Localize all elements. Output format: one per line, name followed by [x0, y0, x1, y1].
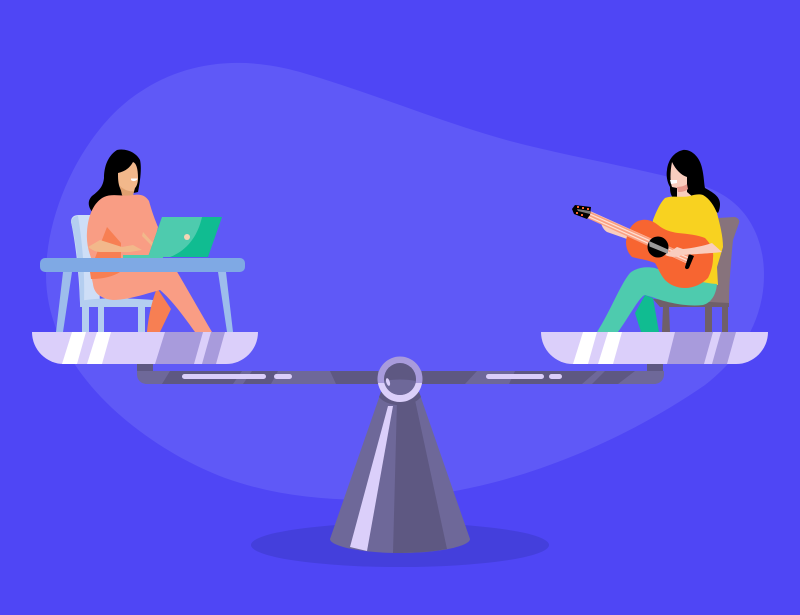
front leg	[597, 267, 717, 332]
pan body	[32, 332, 258, 364]
strings over hole	[649, 241, 668, 254]
front arm	[665, 243, 722, 257]
headstock plate	[577, 209, 590, 214]
hair	[89, 149, 141, 213]
chair legs	[82, 304, 145, 332]
laptop logo	[184, 234, 190, 240]
guitar headstock	[572, 205, 591, 219]
chair seat	[80, 298, 153, 307]
chair back	[71, 215, 100, 303]
right long highlight	[486, 374, 544, 379]
neck shade	[120, 186, 134, 197]
scale beam	[137, 364, 664, 384]
scale stand	[330, 392, 470, 553]
ring centre light	[384, 380, 416, 395]
left support	[137, 364, 153, 371]
smile	[670, 180, 677, 184]
neck and face	[118, 162, 138, 197]
pan dark stripes	[667, 332, 736, 364]
right short highlight	[549, 374, 562, 379]
ring centre	[384, 363, 416, 395]
hair	[667, 150, 720, 213]
back leg	[635, 295, 659, 332]
left scale pan	[32, 332, 258, 364]
pan body	[541, 332, 768, 364]
right figure: woman with guitar	[572, 150, 739, 332]
pivot ring	[378, 356, 422, 402]
chair back shade	[71, 216, 84, 303]
table top	[40, 258, 245, 272]
left figure: woman at laptop	[40, 149, 245, 332]
right scale pan	[541, 332, 768, 364]
chair back	[690, 217, 739, 303]
pan white stripes	[573, 332, 622, 364]
chair legs	[662, 307, 728, 332]
forearm	[88, 240, 142, 252]
pan white stripes	[62, 332, 111, 364]
torso and sleeve	[87, 195, 158, 268]
guitar sound hole	[648, 236, 668, 258]
sleeve inner line	[142, 232, 153, 246]
shirt	[650, 194, 723, 285]
ring glint	[385, 378, 391, 386]
lower torso shade	[90, 272, 120, 279]
guitar bridge	[685, 254, 694, 269]
pan dark stripes	[155, 332, 225, 364]
neck shade	[677, 184, 688, 192]
ground shadow	[251, 523, 549, 567]
laptop screen light	[148, 217, 202, 257]
beam dark segments	[162, 371, 635, 384]
ring top	[378, 356, 422, 402]
orange torso shade	[95, 227, 121, 258]
cone highlight	[350, 406, 393, 551]
cone body	[330, 392, 470, 553]
beam base	[137, 371, 664, 384]
back leg	[147, 288, 171, 332]
cone collar	[379, 392, 421, 405]
ring bottom	[378, 383, 422, 402]
guitar body	[626, 220, 713, 288]
headstock tuning pegs	[576, 206, 589, 216]
left short highlight	[274, 374, 292, 379]
thigh and front shin	[90, 270, 212, 332]
laptop screen	[148, 217, 222, 257]
chair seat	[653, 299, 729, 307]
table legs	[56, 272, 233, 332]
laptop base	[123, 255, 163, 258]
left long highlight	[182, 374, 266, 379]
cone dark facet	[393, 400, 447, 553]
guitar neck and strings	[587, 211, 690, 264]
smile	[131, 178, 138, 181]
back hand and forearm	[601, 221, 630, 239]
face and neck	[670, 162, 693, 199]
right support	[647, 364, 663, 371]
background blob	[46, 63, 764, 500]
